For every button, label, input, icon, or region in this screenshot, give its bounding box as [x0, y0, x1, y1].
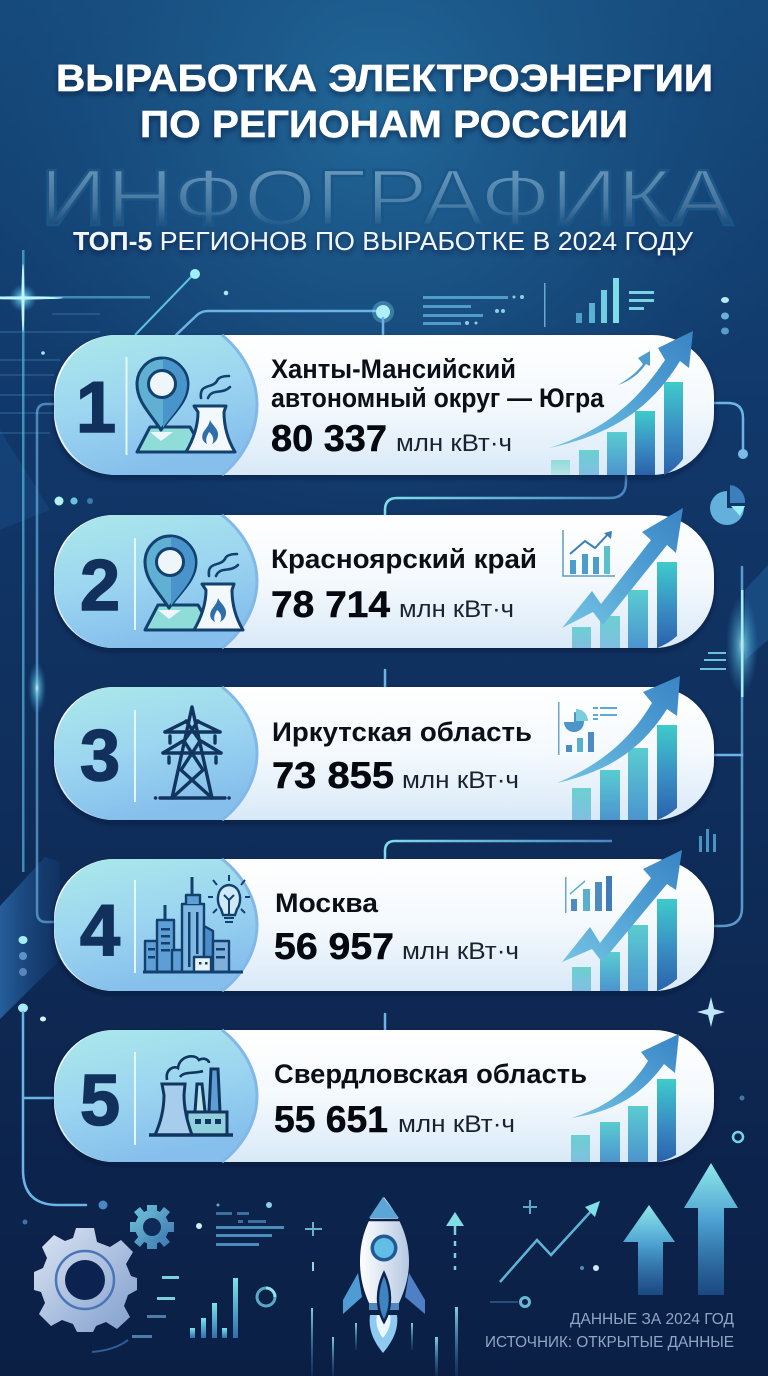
rocket: [311, 1197, 458, 1376]
connectors between cards: [22, 403, 758, 1224]
value 3: 73 855: [272, 755, 394, 796]
name 2: Красноярский край: [271, 544, 537, 574]
value 1: [271, 418, 512, 459]
rising line chart: [490, 1200, 600, 1306]
icon: small gear: [130, 1205, 174, 1249]
growth chart 3: [557, 676, 680, 820]
rank 5: 5: [80, 1061, 120, 1141]
icon: pin and power plant: [145, 536, 243, 630]
icon: city with light bulb: [143, 875, 250, 972]
region panel 1: [54, 335, 257, 475]
value 4: 56 957: [274, 926, 394, 967]
value 3: млн кВт·ч: [402, 767, 519, 794]
name 5: Свердловская область: [274, 1059, 587, 1089]
value 2: [271, 584, 514, 625]
icon: power transmission tower: [156, 707, 229, 798]
subtitle: ТОП-5 РЕГИОНОВ ПО ВЫРАБОТКЕ В 2024 ГОДУ: [73, 226, 693, 256]
rank 2: 2: [80, 546, 120, 626]
bottom left data decor: [92, 1202, 322, 1352]
footer note: ДАННЫЕ ЗА 2024 ГОД: [570, 1311, 734, 1328]
mini chart 2: [563, 530, 615, 576]
value 5: млн кВт·ч: [398, 1111, 515, 1138]
up arrow large: [684, 1163, 738, 1295]
title: [56, 58, 713, 146]
value 4: млн кВт·ч: [402, 938, 519, 965]
growth chart 4: [562, 850, 682, 991]
value 2: 78 714: [271, 584, 390, 625]
glowing circuit lines left and top: [0, 250, 394, 1022]
region panel 4: [54, 859, 257, 991]
small dashed up arrow: [446, 1212, 464, 1270]
card 5: Sverdlovsk: [54, 1030, 714, 1162]
icon: factory with cooling tower: [149, 1056, 233, 1135]
icon: large gear: [34, 1228, 137, 1332]
rank 3: 3: [80, 716, 120, 796]
value 2: млн кВт·ч: [399, 596, 514, 623]
up arrow small: [623, 1205, 675, 1295]
rank 4: 4: [80, 891, 120, 971]
value 1: 80 337: [271, 418, 387, 459]
growth chart 5: [571, 1034, 679, 1162]
value 1: млн кВт·ч: [396, 430, 512, 457]
card 2: Krasnoyarsk: [54, 508, 714, 648]
name 1: [271, 354, 604, 413]
card 1: Khanty-Mansi: [54, 331, 714, 475]
name 1: автономный округ — Югра: [271, 383, 604, 413]
footer note: [485, 1311, 734, 1351]
top right mini dashboard: [423, 278, 729, 334]
watermark word: ИНФОГРАФИКА: [40, 153, 734, 242]
right side decor: pie, bars, sparkle, dots: [697, 485, 745, 1142]
title: ПО РЕГИОНАМ РОССИИ: [140, 104, 628, 146]
growth chart 2: [562, 508, 683, 648]
title: ВЫРАБОТКА ЭЛЕКТРОЭНЕРГИИ: [56, 58, 713, 100]
region panel 5: [54, 1030, 257, 1162]
rank 1: 1: [76, 368, 116, 448]
growth chart 1: [549, 331, 693, 475]
value 5: 55 651: [274, 1099, 388, 1140]
value 5: [274, 1099, 515, 1140]
card 3: Irkutsk: [54, 676, 714, 820]
value 4: [274, 926, 519, 967]
name 4: Москва: [275, 888, 378, 918]
footer note: ИСТОЧНИК: ОТКРЫТЫЕ ДАННЫЕ: [485, 1334, 734, 1351]
region panel 3: [54, 687, 257, 820]
mini pie and bars 3: [558, 702, 617, 755]
region panel 2: [54, 515, 257, 648]
card 4: Moscow: [54, 850, 714, 991]
mini bars 4: [565, 876, 612, 913]
name 1: Ханты-Мансийский: [271, 354, 516, 384]
value 3: [272, 755, 519, 796]
icon: pin and power plant: [137, 358, 235, 452]
name 3: Иркутская область: [272, 717, 532, 747]
